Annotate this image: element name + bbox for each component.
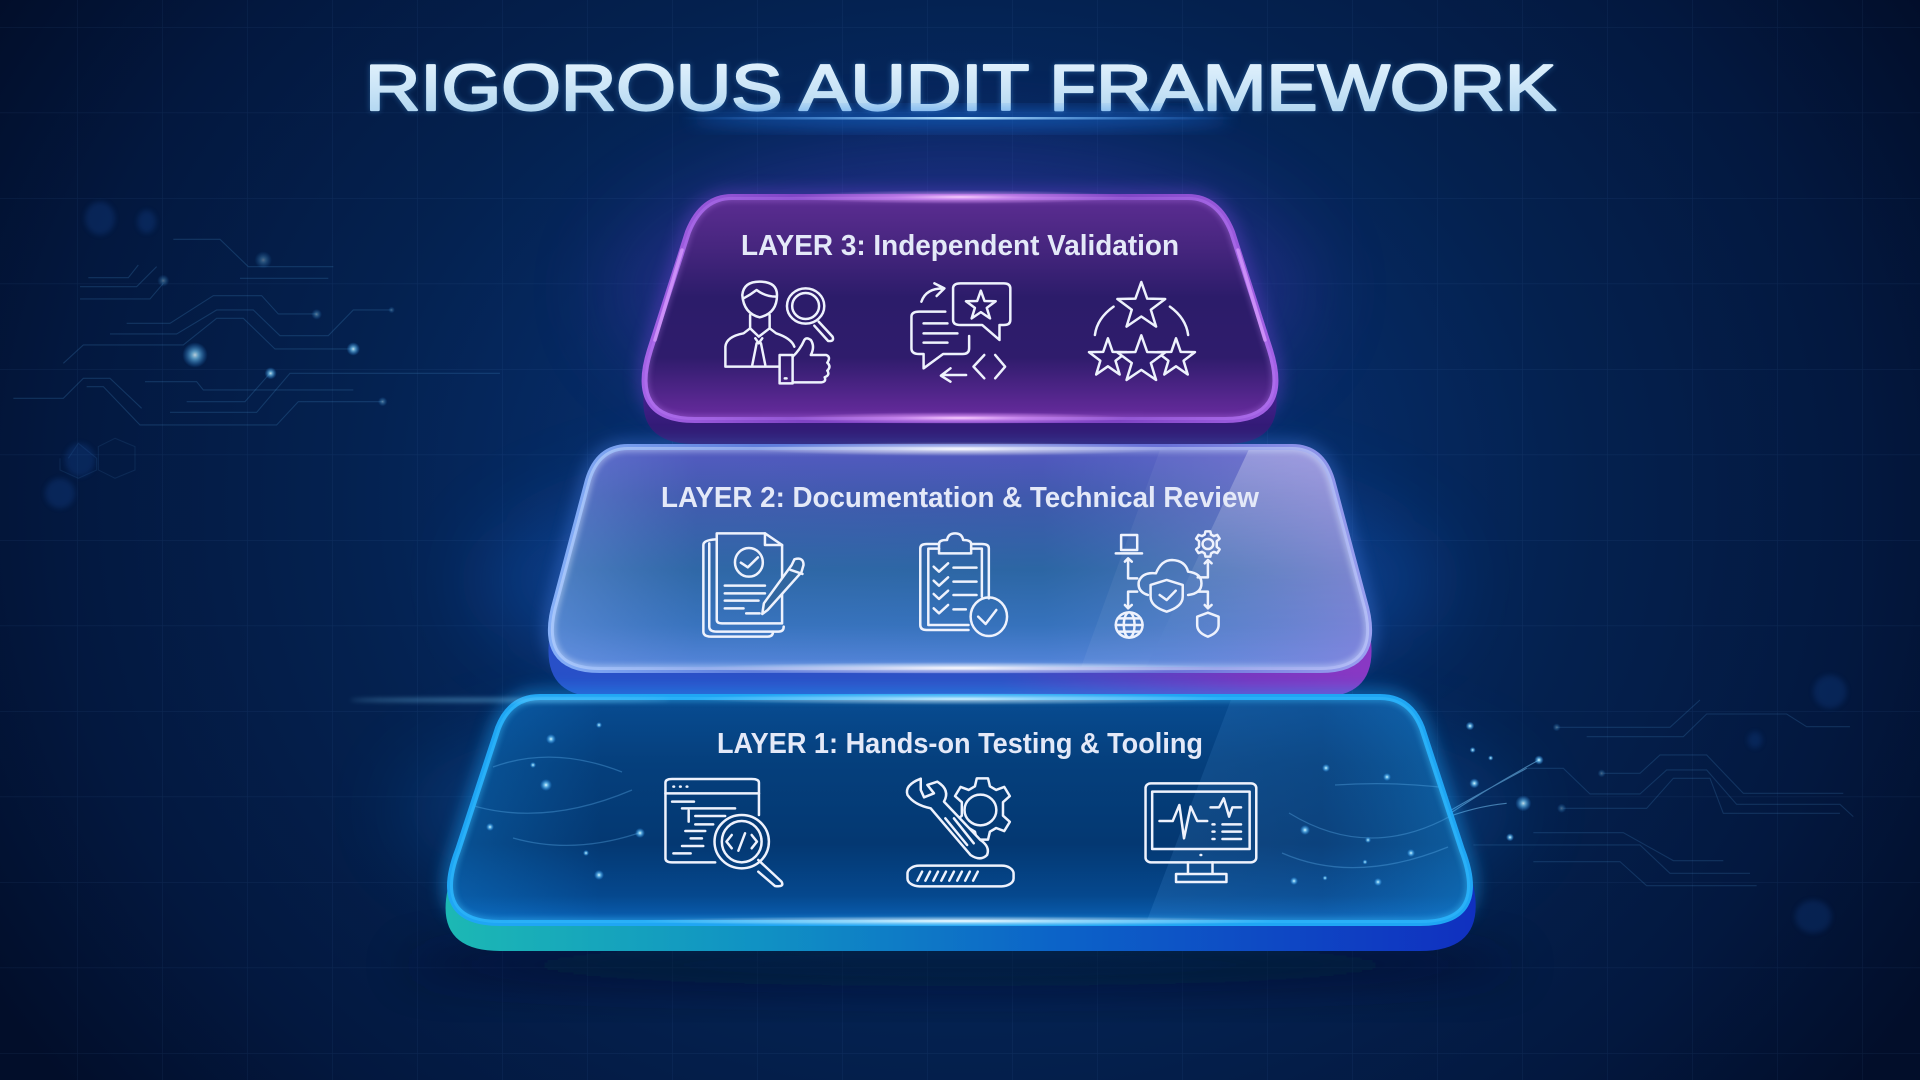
layer 1 top highlight: [690, 693, 1230, 705]
icon: rating stars: [1089, 282, 1195, 380]
layer 2 face: [551, 447, 1369, 670]
icon: wrench, gear and progress bar: [907, 778, 1014, 886]
layer 2 heading: LAYER 2: Documentation & Technical Review: [661, 482, 1259, 514]
layer 2 top highlight: [750, 442, 1170, 456]
title: RIGOROUS AUDIT FRAMEWORK: [365, 51, 1556, 124]
layer 3 bottom highlight: [790, 412, 1130, 424]
icon: monitor with health chart: [1146, 783, 1256, 882]
layer 3 heading: LAYER 3: Independent Validation: [741, 230, 1179, 262]
layer 3 base: [643, 300, 1277, 444]
layer 1 glass reflection: [1148, 701, 1360, 919]
icon: checklist clipboard: [920, 533, 1007, 636]
icon: feedback chat bubbles with star: [911, 283, 1010, 382]
layer 1 sparkles: [447, 722, 1415, 886]
panel: layer 2: [540, 440, 1400, 697]
icon: auditor with magnifier and thumbs up: [725, 282, 833, 383]
layer 1 bottom highlight: [640, 916, 1280, 926]
layer 1 heading: LAYER 1: Hands-on Testing & Tooling: [717, 728, 1203, 760]
layer 1 face: [450, 697, 1470, 923]
layer 1 horizontal flare: [350, 698, 670, 702]
icon: signed documents with pencil: [703, 533, 804, 637]
layer 3 top highlight: [790, 190, 1130, 204]
layer 1 base: [446, 800, 1476, 951]
layer 2 bottom highlight: [700, 662, 1220, 674]
circuit decoration: right: [1440, 675, 1853, 933]
layer 1 light swooshes: [440, 757, 1480, 868]
icon: cloud security network: [1116, 531, 1220, 638]
panel: layer 3: [643, 190, 1277, 444]
layer 3 left edge highlight: [655, 250, 682, 340]
panel: layer 1: [350, 690, 1480, 951]
title underline glow: [680, 109, 1240, 129]
title: RIGOROUS AUDIT FRAMEWORK: [365, 51, 1556, 124]
circuit decoration: left: [13, 202, 500, 508]
layer 2 glass reflection: [1156, 450, 1364, 646]
layer 3 right edge highlight: [1238, 250, 1265, 340]
icon: code window with magnifier: [665, 779, 782, 886]
layer 2 base: [548, 560, 1372, 697]
layer 3 face: [645, 197, 1275, 420]
